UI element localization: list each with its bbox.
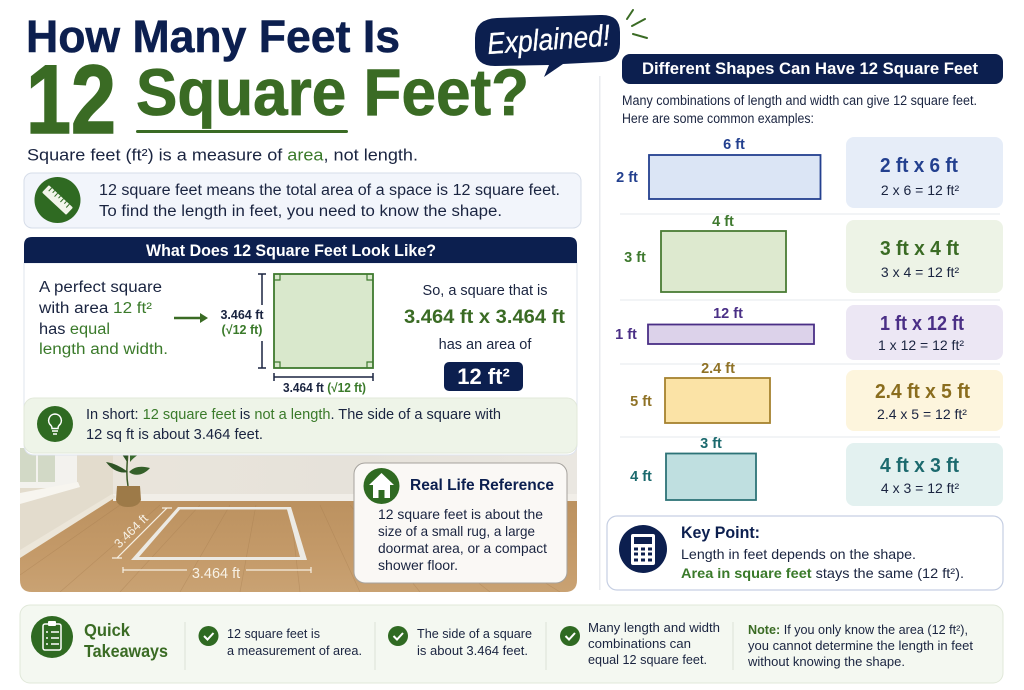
row: 3 by 4: 3 ft <box>624 250 646 266</box>
result text: 3.464 ft x 3.464 ft <box>404 307 566 328</box>
definition text: 12 square feet means the total area of a space is 12 square feet. <box>99 182 560 199</box>
panel: different shapes <box>615 54 1003 506</box>
card text: 12 square feet is about the <box>378 506 543 522</box>
card: 3 by 4: 3 ft x 4 ft <box>880 238 959 260</box>
card: 3 by 4 <box>846 220 1003 293</box>
icon: light bulb <box>37 406 73 442</box>
section heading <box>622 54 1003 84</box>
explanation text: A perfect square <box>39 279 162 296</box>
result badge: 12 ft² <box>457 364 510 389</box>
card text: size of a small rug, a large <box>378 523 535 539</box>
key point text: Length in feet depends on the shape. <box>681 546 916 562</box>
takeaways heading: Quick <box>84 620 130 640</box>
card: 3 by 4: 3 x 4 = 12 ft² <box>881 264 959 280</box>
intro text: Many combinations of length and width can give 12 square feet. <box>622 93 977 108</box>
takeaway two: is about 3.464 feet. <box>417 643 528 658</box>
panel: key point <box>607 516 1003 590</box>
note: Note: If you only know the area (12 ft²), <box>748 623 968 637</box>
row: 1 by 12 <box>615 305 1003 360</box>
panel: quick takeaways <box>20 605 1003 683</box>
photo: room with floor marking <box>20 448 577 592</box>
icon: clipboard <box>31 616 73 658</box>
vertical dimension <box>220 274 266 368</box>
section heading <box>24 237 577 263</box>
vertical dimension: 3.464 ft <box>220 308 264 322</box>
row: 2 by 6 <box>616 137 1003 208</box>
note: without knowing the shape. <box>747 655 905 669</box>
card: 2.4 by 5 <box>846 370 1003 431</box>
takeaways heading <box>84 620 168 661</box>
card: 2.4 by 5: 2.4 ft x 5 ft <box>875 381 970 403</box>
takeaway two <box>388 626 532 658</box>
in short text <box>86 407 501 443</box>
panel: what does 12 square feet look like <box>24 237 577 455</box>
card: 2.4 by 5: 2.4 x 5 = 12 ft² <box>877 406 967 422</box>
floor marking <box>131 507 307 560</box>
in short text: 12 sq ft is about 3.464 feet. <box>86 427 263 443</box>
card: 2 by 6 <box>846 137 1003 208</box>
row: 3 by 4 <box>624 214 1003 293</box>
vertical dimension: (√12 ft) <box>222 323 262 337</box>
intro text: Here are some common examples: <box>622 111 814 126</box>
floor label: bottom: 3.464 ft <box>192 566 240 582</box>
badge: explained: Explained! <box>486 19 612 61</box>
takeaway one: 12 square feet is <box>227 626 320 641</box>
icon: calculator <box>619 525 667 573</box>
takeaway one: a measurement of area. <box>227 643 362 658</box>
takeaway three: Many length and width <box>588 620 720 635</box>
card: 2 by 6: 2 x 6 = 12 ft² <box>881 182 959 198</box>
title: 12: 12 <box>26 45 116 154</box>
card text <box>378 506 547 573</box>
panel: in short <box>24 398 577 453</box>
section heading: Different Shapes Can Have 12 Square Feet <box>642 59 978 78</box>
icon: sparkle rays <box>627 10 647 38</box>
card: 1 by 12 <box>846 305 1003 360</box>
key point text <box>681 546 964 581</box>
badge: explained <box>475 15 620 77</box>
explanation text: length and width. <box>39 341 168 358</box>
subtitle: Square feet (ft²) is a measure of area, not length. <box>27 146 418 164</box>
takeaway two: The side of a square <box>417 626 532 641</box>
explanation text: with area 12 ft² <box>38 300 152 317</box>
card text: shower floor. <box>378 557 458 573</box>
takeaway three: combinations can <box>588 636 691 651</box>
title: how many feet is: How Many Feet Is <box>26 11 400 62</box>
card: 1 by 12: 1 x 12 = 12 ft² <box>878 337 964 353</box>
result text: So, a square that is <box>423 283 547 299</box>
card: 1 by 12: 1 ft x 12 ft <box>880 313 964 335</box>
horizontal dimension: 3.464 ft (√12 ft) <box>283 381 366 395</box>
section heading: What Does 12 Square Feet Look Like? <box>146 242 436 260</box>
takeaway one <box>198 626 362 658</box>
key point heading: Key Point: <box>681 524 760 542</box>
floor label: diagonal: 3.464 ft <box>111 511 151 551</box>
plant <box>106 456 150 507</box>
row: 3 by 4: 4 ft <box>712 214 734 230</box>
card: 4 by 3: 4 ft x 3 ft <box>880 455 959 477</box>
result text: has an area of <box>439 337 532 353</box>
explanation text: has equal <box>39 321 110 338</box>
takeaways heading: Takeaways <box>84 641 168 661</box>
explanation text <box>38 279 168 358</box>
row: 4 by 3: 3 ft <box>700 436 722 452</box>
row: 2 by 6: 2 ft <box>616 170 638 186</box>
card: 2 by 6: 2 ft x 6 ft <box>880 155 958 177</box>
panel: definition <box>24 173 581 228</box>
intro text <box>622 93 977 126</box>
takeaway three <box>560 620 720 667</box>
horizontal dimension <box>274 373 373 395</box>
in short text: In short: 12 square feet is not a length. The side of a square with <box>86 407 501 423</box>
note <box>747 623 974 669</box>
result text <box>404 283 566 353</box>
icon: ruler <box>34 177 80 223</box>
card heading: Real Life Reference <box>410 477 554 494</box>
key point text: Area in square feet stays the same (12 ft²). <box>681 565 964 581</box>
row: 2.4 by 5: 2.4 ft <box>701 361 735 377</box>
column divider <box>599 76 600 590</box>
panel: real life reference <box>354 463 567 583</box>
icon: house <box>364 468 400 504</box>
row: 2 by 6: 6 ft <box>723 137 745 153</box>
result badge <box>444 362 523 391</box>
row: 4 by 3 <box>630 436 1003 506</box>
card: 4 by 3 <box>846 443 1003 506</box>
card text: doormat area, or a compact <box>378 540 547 556</box>
title underline <box>136 130 348 133</box>
arrow <box>174 313 208 323</box>
row: 1 by 12: 1 ft <box>615 327 637 343</box>
row: 2.4 by 5: 5 ft <box>630 394 652 410</box>
row: 4 by 3: 4 ft <box>630 469 652 485</box>
definition text: To find the length in feet, you need to know the shape. <box>99 203 502 220</box>
card: 4 by 3: 4 x 3 = 12 ft² <box>881 480 959 496</box>
row: 1 by 12: 12 ft <box>713 306 743 322</box>
note: you cannot determine the length in feet <box>748 639 974 653</box>
row: 2.4 by 5 <box>630 361 1003 431</box>
definition text <box>99 182 560 220</box>
green square <box>274 274 373 368</box>
title: square feet: Square Feet? <box>136 55 529 129</box>
takeaway three: equal 12 square feet. <box>588 652 707 667</box>
